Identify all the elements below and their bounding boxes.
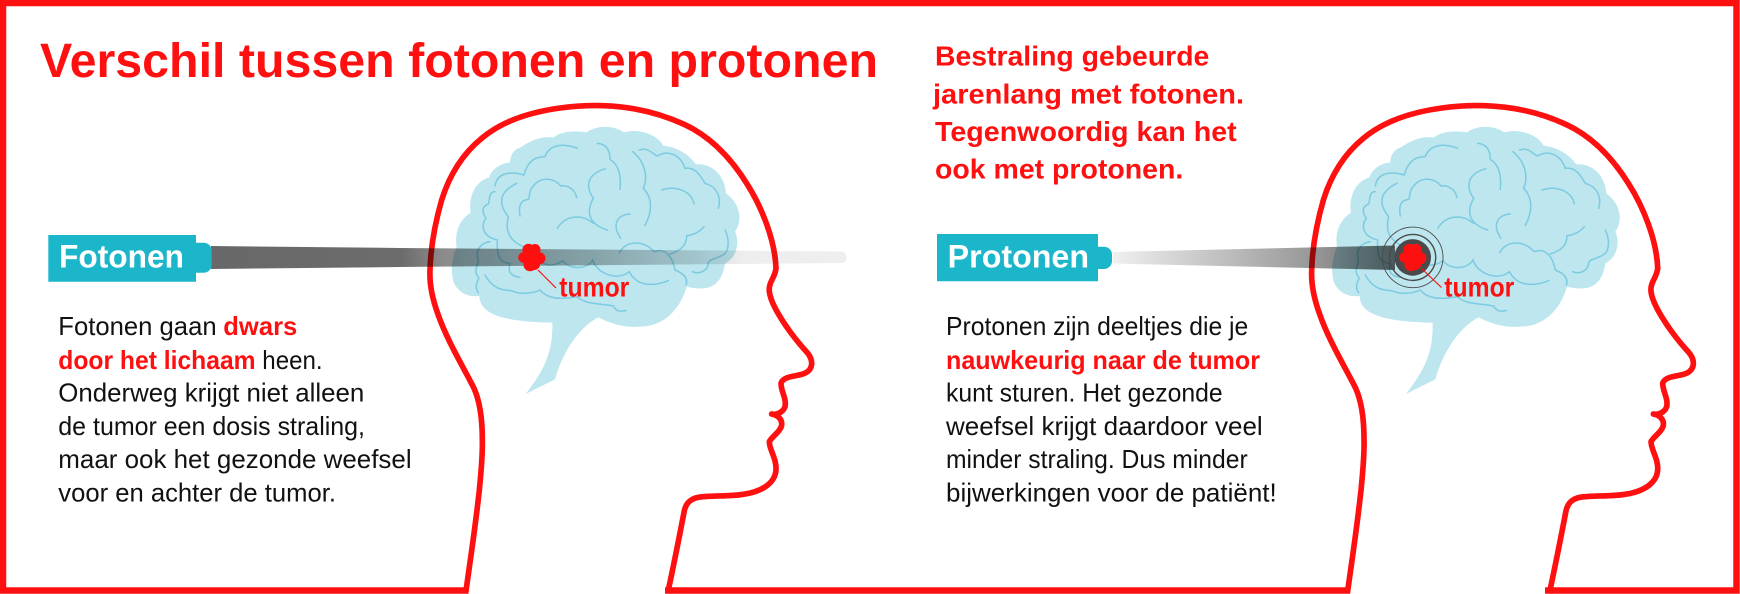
- device label: Protonen: Protonen: [948, 239, 1089, 275]
- intro text block: jarenlang met fotonen.: [932, 78, 1244, 109]
- text block: photons explanation: de tumor een dosis straling,: [58, 411, 365, 441]
- text block: photons explanation: Onderweg krijgt niet alleen: [58, 378, 364, 408]
- photon beam passing through the head: [211, 246, 847, 269]
- head outline: right: [1312, 106, 1693, 593]
- intro text block: [932, 41, 1244, 184]
- label: right tumor: tumor: [1444, 272, 1514, 303]
- brain: right: [1332, 127, 1620, 394]
- text block: photons explanation: Fotonen gaan: [58, 311, 217, 341]
- text block: protons explanation: nauwkeurig naar de tumor: [946, 345, 1260, 375]
- text block: protons explanation: bijwerkingen voor de patiënt!: [946, 478, 1277, 508]
- text block: photons explanation: [58, 311, 412, 508]
- head outline: left: [430, 106, 812, 593]
- target rings around right tumor: [1382, 227, 1443, 288]
- intro text block: Tegenwoordig kan het: [935, 116, 1237, 147]
- brain: left: [452, 127, 740, 394]
- device label: Fotonen: [48, 235, 212, 282]
- leader line: left tumor: [538, 270, 556, 288]
- text block: photons explanation: voor en achter de tumor.: [58, 478, 336, 508]
- text block: protons explanation: minder straling. Dus minder: [946, 444, 1248, 474]
- tumor: left: [518, 244, 545, 271]
- text block: protons explanation: [945, 311, 1277, 508]
- text block: photons explanation: door het lichaam: [58, 345, 256, 375]
- text block: protons explanation: kunt sturen. Het gezonde: [946, 378, 1223, 408]
- leader line: right tumor: [1421, 268, 1442, 288]
- intro text block: Bestraling gebeurde: [935, 41, 1209, 72]
- text block: photons explanation: maar ook het gezonde weefsel: [58, 444, 412, 474]
- text block: photons explanation: dwars: [223, 311, 297, 341]
- tumor: right: [1399, 244, 1426, 271]
- text block: protons explanation: Protonen zijn deeltjes die je: [946, 311, 1248, 341]
- text block: protons explanation: weefsel krijgt daardoor veel: [945, 411, 1263, 441]
- device label: Fotonen: Fotonen: [59, 239, 184, 275]
- device label: Protonen: [937, 234, 1112, 281]
- title: Verschil tussen fotonen en protonen: [40, 35, 878, 88]
- text block: photons explanation: heen.: [262, 345, 323, 375]
- proton beam stopping at the tumor: [1113, 246, 1395, 270]
- intro text block: ook met protonen.: [935, 153, 1183, 184]
- label: left tumor: tumor: [559, 272, 629, 303]
